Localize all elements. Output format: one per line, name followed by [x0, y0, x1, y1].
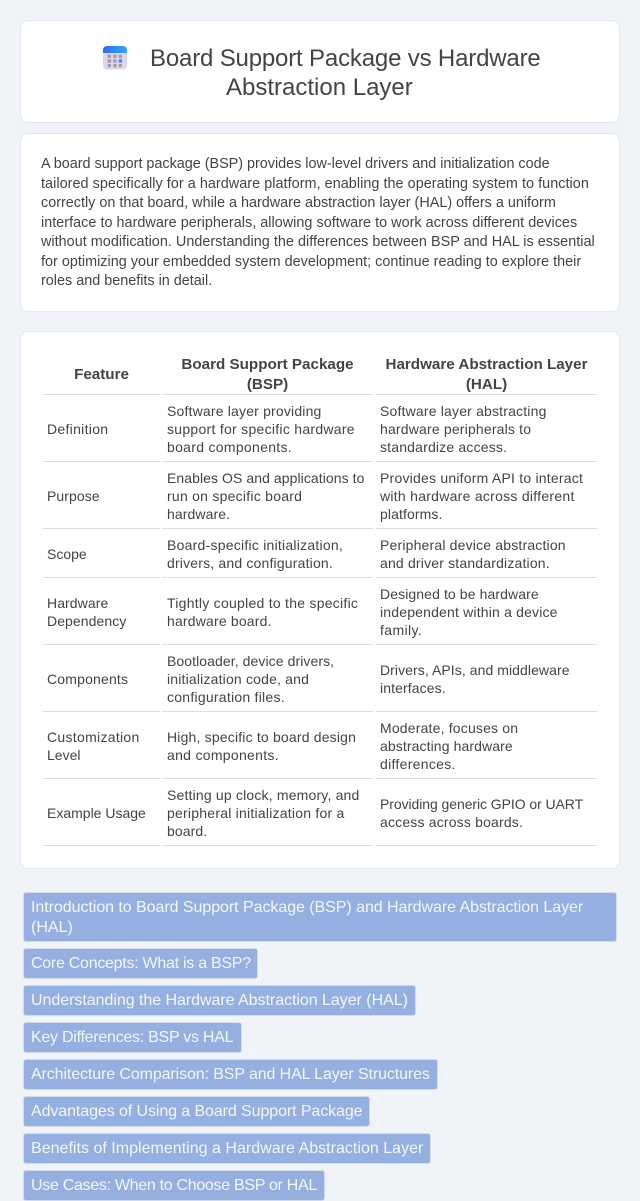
row: Example Usage: Setting up clock, memory, and — [167, 787, 360, 803]
row: Purpose: Enables OS and applications to — [167, 470, 364, 486]
row: Example Usage: access across boards. — [380, 814, 523, 830]
row: Definition — [47, 403, 547, 455]
row: Customization Level: abstracting hardware — [380, 738, 513, 754]
row: Hardware Dependency: family. — [380, 622, 422, 638]
table header: Hardware Abstraction Layer — [385, 356, 588, 373]
row: Components: configuration files. — [167, 689, 285, 705]
row: Purpose: with hardware across different — [380, 488, 575, 504]
link: advantages — [23, 1096, 370, 1127]
text block: summary: roles and benefits in detail. — [41, 273, 212, 289]
text block: summary: A board support package (BSP) provides low-level drivers and initialization code — [41, 156, 550, 172]
row: Customization Level: High, specific to board design — [167, 729, 356, 745]
row: Components: interfaces. — [380, 680, 446, 696]
row: Hardware Dependency: Designed to be hardware — [380, 586, 539, 602]
title — [150, 45, 541, 101]
link: key differences — [23, 1022, 242, 1053]
table header: Board Support Package — [181, 356, 354, 373]
row: Definition: Software layer providing — [167, 403, 322, 419]
link: introduction: Introduction to Board Support Package (BSP) and Hardware Abstraction Layer — [31, 899, 583, 916]
row: Example Usage: board. — [167, 823, 207, 839]
row: Definition: support for specific hardware — [167, 421, 355, 437]
panel: summary text — [20, 133, 620, 312]
row: Scope: and driver standardization. — [380, 555, 550, 571]
link: introduction: (HAL) — [31, 918, 73, 936]
row: Customization Level: Customization — [47, 729, 140, 745]
row: Hardware Dependency: hardware board. — [167, 613, 272, 629]
row: Scope: Board-specific initialization, — [167, 537, 343, 553]
link: benefits — [23, 1133, 431, 1164]
link: understanding HAL — [23, 985, 416, 1016]
row: Example Usage: Example Usage — [47, 805, 146, 821]
row: Definition: Software layer abstracting — [380, 403, 547, 419]
row: Example Usage — [47, 787, 583, 839]
row: Customization Level: and components. — [167, 747, 279, 763]
row: Hardware Dependency: Tightly coupled to the specific — [167, 595, 358, 611]
table header: (HAL) — [466, 376, 507, 393]
row: Customization Level: Moderate, focuses on — [380, 720, 518, 736]
table header: (BSP) — [247, 376, 288, 393]
row: Customization Level: differences. — [380, 756, 456, 772]
row: Scope: Peripheral device abstraction — [380, 537, 566, 553]
row: Purpose — [47, 470, 583, 522]
link: advantages: Advantages of Using a Board Support Package — [31, 1103, 362, 1120]
row: Definition: Definition — [47, 421, 108, 437]
link: architecture comparison — [23, 1059, 438, 1090]
text block: summary: interface to hardware peripherals, allowing software to work across different devices — [41, 214, 577, 230]
link: use cases — [23, 1170, 325, 1201]
row: Hardware Dependency: Dependency — [47, 613, 126, 629]
row: Scope — [47, 537, 566, 571]
link: core concepts: Core Concepts: What is a BSP? — [31, 955, 251, 972]
row: Scope: drivers, and configuration. — [167, 555, 333, 571]
row: Definition: board components. — [167, 439, 292, 455]
text block: summary: for optimizing your embedded system development; continue reading to explore their — [41, 254, 581, 270]
row: Components: Components — [47, 671, 128, 687]
link: understanding HAL: Understanding the Hardware Abstraction Layer (HAL) — [31, 992, 408, 1009]
row: Definition: standardize access. — [380, 439, 507, 455]
row: Purpose: platforms. — [380, 506, 442, 522]
row: Example Usage: Providing generic GPIO or UART — [380, 796, 583, 812]
row: Hardware Dependency: independent within a device — [380, 604, 558, 620]
link: architecture comparison: Architecture Comparison: BSP and HAL Layer Structures — [31, 1066, 430, 1083]
text block: summary: correctly on that board, while a hardware abstraction layer (HAL) offers a uniform — [41, 195, 556, 211]
link: benefits: Benefits of Implementing a Hardware Abstraction Layer — [31, 1140, 423, 1157]
text block: summary: without modification. Understanding the differences between BSP and HAL is essential — [41, 234, 595, 250]
panel: title card — [20, 20, 620, 123]
row: Hardware Dependency: Hardware — [47, 595, 108, 611]
table header — [74, 356, 588, 393]
title: Board Support Package vs Hardware — [150, 45, 541, 72]
row: Definition: hardware peripherals to — [380, 421, 531, 437]
row: Purpose: Purpose — [47, 488, 100, 504]
row: Example Usage: peripheral initialization for a — [167, 805, 345, 821]
link: introduction — [23, 892, 617, 942]
link: use cases: Use Cases: When to Choose BSP or HAL — [31, 1177, 317, 1194]
text block: summary — [41, 156, 595, 289]
row: Components: Drivers, APIs, and middleware — [380, 662, 570, 678]
row: Scope: Scope — [47, 546, 87, 562]
row: Purpose: hardware. — [167, 506, 230, 522]
row: Components: Bootloader, device drivers, — [167, 653, 334, 669]
text block: summary: tailored specifically for a hardware platform, enabling the operating system to function — [41, 176, 589, 192]
link: key differences: Key Differences: BSP vs HAL — [31, 1029, 233, 1046]
table header: Feature — [74, 366, 129, 383]
link: core concepts — [23, 948, 258, 979]
row: Customization Level — [47, 720, 518, 772]
row: Purpose: Provides uniform API to interact — [380, 470, 583, 486]
panel: comparison table — [20, 331, 620, 869]
row: Purpose: run on specific board — [167, 488, 302, 504]
icon: calendar — [103, 46, 127, 70]
row: Hardware Dependency — [47, 586, 558, 638]
row: Components — [47, 653, 570, 705]
title: Abstraction Layer — [226, 74, 413, 101]
row: Components: initialization code, and — [167, 671, 309, 687]
row: Customization Level: Level — [47, 747, 80, 763]
